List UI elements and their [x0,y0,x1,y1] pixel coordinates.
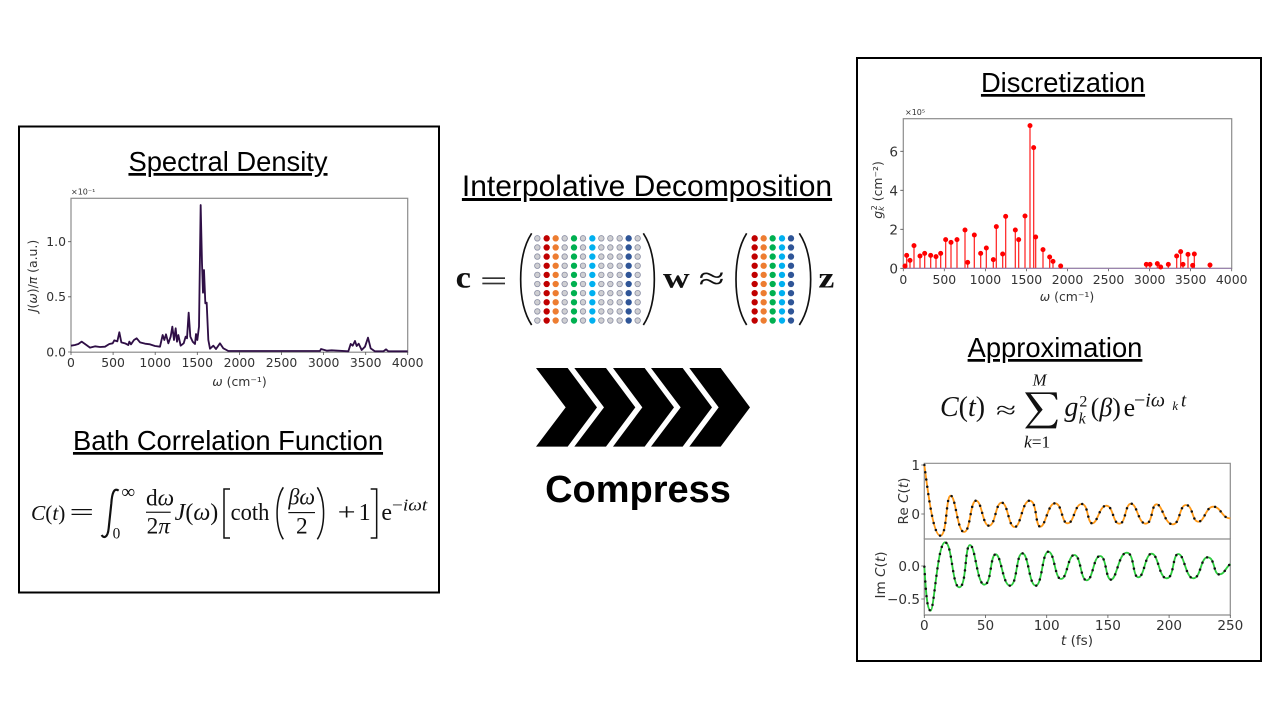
heading: spectral density: Spectral Density [128,146,328,177]
chart: spectral density: 1000 [139,355,171,370]
chart: discretization stems: 2500 [1093,272,1124,287]
equation: sum over modes: −iω [1134,390,1165,412]
chart: discretization stems: ×10⁵ [905,108,925,117]
chart: discretization stems: g [870,211,885,219]
heading: interpolative decomposition: Interpolative Decomposition [462,170,832,203]
heading: discretization: Discretization [981,67,1145,98]
chart: spectral density: 2500 [266,355,297,370]
equation: matrix decomposition: w [663,262,690,295]
equation: matrix decomposition: c [456,261,471,295]
equation: bath correlation function: = [69,500,94,526]
equation: sum over modes: k [1079,410,1087,427]
equation: bath correlation function: 2 [296,513,308,539]
chart: imaginary part of correlation: Im C(t) [873,551,889,599]
equation: matrix decomposition: z [818,262,834,295]
arrow: chevrons [536,368,750,447]
chart: imaginary part of correlation [873,539,1243,649]
equation: bath correlation function: ∞ [121,482,135,503]
equation: sum over modes: C(t) [940,392,985,423]
equation: sum over modes: 2 [1079,394,1087,411]
equation: sum over modes: M [1032,371,1048,390]
equation: bath correlation function: + [338,500,356,526]
chart: discretization stems: 4 [889,183,898,199]
chart: discretization stems: 0 [899,272,907,287]
chart: discretization stems: ω (cm⁻¹) [1040,289,1094,304]
chart: spectral density: 1500 [182,355,213,370]
equation: bath correlation function: 0 [113,525,121,542]
equation: bath correlation function [31,482,428,542]
chart: real part of correlation: 1 [911,458,920,474]
chart: discretization stems: 1500 [1011,272,1042,287]
chart: spectral density: J(ω)/π (a.u.) [25,240,40,315]
chart: discretization stems: 500 [932,272,956,287]
equation: bath correlation function: dω [146,485,174,511]
label: compress: Compress [545,469,731,511]
chart: imaginary part of correlation: 100 [1034,618,1060,634]
chart: imaginary part of correlation: −0.5 [887,592,920,608]
chart: discretization stems: 2 [870,205,879,210]
chart: discretization stems: 3000 [1134,272,1165,287]
equation: bath correlation function: 2π [147,513,171,539]
chart: discretization stems [870,108,1248,304]
matrix: selected columns dots [755,238,791,322]
chart: spectral density: 3500 [350,355,382,370]
chart: spectral density: ×10⁻¹ [71,188,95,196]
chart: imaginary part of correlation: 50 [977,618,994,634]
chart: imaginary part of correlation: 150 [1095,618,1121,634]
equation: sum over modes: k=1 [1024,433,1050,452]
chart: spectral density [25,188,424,389]
chart: spectral density: 1.0 [46,234,66,249]
equation: sum over modes: g [1064,392,1078,423]
equation: matrix decomposition: ≈ [699,260,725,296]
equation: bath correlation function: e [381,500,392,526]
panel: discretization and approximation [857,58,1261,661]
equation: bath correlation function: J(ω) [175,500,218,526]
chart: discretization stems: 2000 [1052,272,1083,287]
chart: imaginary part of correlation: 0 [920,618,929,634]
chart: imaginary part of correlation: 200 [1156,618,1182,634]
equation: sum over modes: ≈ [996,398,1016,424]
chart: discretization stems: 6 [889,144,898,160]
heading: bath correlation function: Bath Correlation Function [73,425,383,456]
equation: bath correlation function: coth [231,500,269,526]
chart: imaginary part of correlation: 0.0 [898,559,920,575]
chart: discretization stems: 3500 [1175,272,1206,287]
chart: imaginary part of correlation: t (fs) [1061,633,1093,649]
equation: sum over modes: t [1181,391,1187,412]
heading: approximation: Approximation [968,332,1142,363]
chart: spectral density: ω (cm⁻¹) [212,374,267,389]
panel: spectral density and bath correlation [19,126,439,592]
equation: sum over modes: k [1172,399,1178,413]
chart: spectral density: 3000 [308,355,339,370]
equation: sum over modes [940,371,1187,452]
chart: spectral density: 0 [67,355,75,370]
chart: real part of correlation: Re C(t) [896,478,912,524]
chart: spectral density: 0.5 [46,289,66,304]
equation: sum over modes: (β) [1091,393,1121,422]
chart: discretization stems: (cm⁻²) [870,161,885,205]
equation: bath correlation function: C(t) [31,501,65,525]
chart: discretization stems: 0 [889,261,898,277]
chart: discretization stems: 4000 [1216,272,1248,287]
chart: imaginary part of correlation: 250 [1217,618,1243,634]
chart: discretization stems: k [877,206,886,211]
chart: spectral density: 2000 [224,355,255,370]
chart: spectral density: 4000 [392,355,424,370]
chart: real part of correlation [896,458,1230,539]
chart: spectral density: 0.0 [46,344,66,360]
equation: matrix decomposition [456,233,834,325]
equation: bath correlation function: −iωt [392,496,428,515]
equation: bath correlation function: 1 [359,500,371,526]
chart: real part of correlation: 0 [911,507,920,523]
matrix: full matrix dots [537,238,638,322]
chart: spectral density: 500 [101,355,125,370]
equation: bath correlation function: βω [287,484,315,510]
equation: sum over modes: e [1124,393,1135,422]
chart: discretization stems: 1000 [970,272,1001,287]
chart: discretization stems: 2 [889,222,898,238]
